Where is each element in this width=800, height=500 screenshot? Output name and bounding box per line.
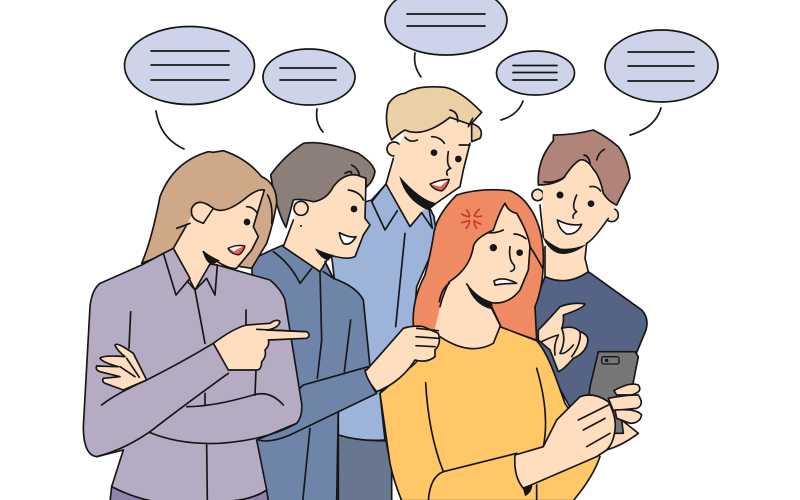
- bubble 4: [496, 51, 574, 120]
- collar and shirt lines: [273, 252, 351, 500]
- man in grey-blue shirt: [252, 143, 377, 500]
- ear: [294, 201, 308, 215]
- phone: [587, 352, 638, 435]
- woman with long light-brown hair: [83, 151, 309, 500]
- face and neck: [386, 117, 472, 225]
- hair: [142, 151, 277, 268]
- pointing hand: [213, 320, 309, 370]
- facial features: [300, 165, 363, 244]
- face outline: [440, 203, 530, 328]
- finger lines: [542, 328, 580, 357]
- collar and placket: [372, 184, 432, 327]
- hand on shoulder: [365, 326, 439, 392]
- ears: [532, 189, 618, 222]
- chin shadow: [399, 176, 437, 210]
- hair: [413, 190, 543, 340]
- fingers on phone: [603, 384, 642, 450]
- facial features: [544, 149, 604, 234]
- trousers: [110, 487, 268, 500]
- anger symbol: [462, 209, 482, 228]
- facial features: [177, 195, 272, 255]
- sweater lines: [426, 368, 546, 500]
- ear: [191, 202, 213, 223]
- chin shadow: [467, 284, 492, 309]
- red-haired woman with yellow sweater: [380, 190, 642, 500]
- face outline: [386, 143, 470, 227]
- hair: [386, 87, 482, 142]
- face outline: [540, 205, 608, 281]
- crossed arm lines: [97, 343, 297, 457]
- finger lines: [120, 358, 139, 377]
- face and neck: [542, 153, 617, 281]
- face and neck: [435, 203, 530, 349]
- hair strands: [439, 247, 543, 302]
- facial features: [488, 230, 526, 285]
- ear: [387, 142, 401, 156]
- face outline: [283, 178, 370, 272]
- finger lines: [578, 405, 610, 447]
- facial features: [405, 110, 473, 191]
- bubble 1: [124, 26, 254, 149]
- chin shadow: [315, 248, 333, 261]
- face outline: [173, 190, 264, 290]
- collar: [163, 248, 217, 295]
- man in light blue shirt: [327, 87, 482, 500]
- bubble 2: [263, 49, 355, 132]
- bubble 3: [385, 0, 507, 77]
- hidden hand: [96, 344, 147, 390]
- bubble 5: [605, 30, 718, 135]
- shirt: [533, 272, 647, 413]
- hair: [538, 130, 630, 205]
- cuff shadow: [523, 484, 533, 496]
- finger lines: [416, 328, 438, 347]
- man in navy shirt: [532, 130, 647, 413]
- speech bubbles: [124, 0, 718, 149]
- face and neck: [283, 175, 370, 272]
- sweater: [380, 327, 600, 500]
- chin shadow: [203, 251, 220, 265]
- pointing hand: [538, 303, 588, 372]
- shirt: [83, 253, 302, 500]
- face and neck: [173, 190, 264, 290]
- arm reaching to shoulder: [258, 367, 377, 441]
- chin shadow: [542, 235, 587, 254]
- hand holding phone: [515, 395, 615, 488]
- hair: [271, 143, 375, 227]
- shirt lines: [129, 290, 256, 500]
- shirt: [327, 184, 437, 440]
- shirt: [252, 245, 370, 500]
- trousers: [338, 435, 392, 500]
- pointing finger line: [257, 329, 307, 332]
